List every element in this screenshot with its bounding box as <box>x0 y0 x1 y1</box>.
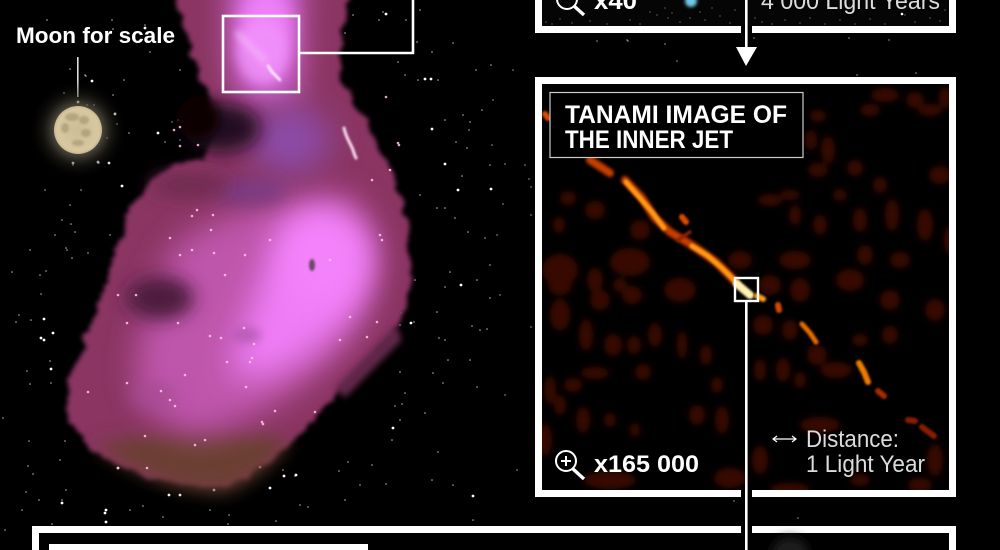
neck purple glow <box>250 106 330 174</box>
panel: TANAMI image of the inner jet <box>538 80 956 497</box>
connector: jet core to bottom panel <box>741 301 752 550</box>
inner jet <box>545 114 934 436</box>
icon: distance arrow <box>773 436 796 442</box>
label: x165 000: x165 000 <box>594 451 699 478</box>
lower lobe bright core <box>232 217 369 378</box>
bottom heading box <box>49 544 368 550</box>
outer lobe fringe <box>68 0 409 486</box>
nebula foreground stars <box>88 97 399 468</box>
radio noise blotches <box>538 87 956 497</box>
panel: optical starfield (x40) <box>535 0 956 33</box>
zoom marker on core <box>735 278 758 301</box>
dark dust patches <box>126 96 402 405</box>
icon: moon <box>28 80 128 180</box>
lower lobe mid tone <box>135 194 375 435</box>
callout box: zoom window on galaxy core with connector <box>223 0 413 92</box>
upper lobe glow <box>232 0 300 100</box>
heading: moon for scale: Moon for scale <box>16 23 175 48</box>
icon: magnifier x40 <box>557 0 584 15</box>
arrow: to TANAMI panel <box>736 0 757 66</box>
radio lobes nebula <box>68 0 409 492</box>
bright upper core <box>240 0 292 76</box>
panel: bottom detail panel <box>36 530 952 550</box>
panel heading box: TANAMI IMAGE OF <box>565 101 787 129</box>
bottom brown fringe <box>95 433 290 492</box>
central galaxy spot <box>309 259 315 271</box>
rough outer lobes <box>68 0 409 486</box>
bright radio filament <box>344 128 356 158</box>
label: distance 1 light year: 1 Light Year <box>806 451 925 478</box>
label: distance 1 light year: Distance: <box>806 426 899 453</box>
panel heading box <box>550 92 803 158</box>
galaxy star glow <box>685 0 697 7</box>
panel heading box: THE INNER JET <box>565 126 733 154</box>
icon: magnifier x165 000 <box>556 451 584 479</box>
label: distance 1 light year <box>806 426 925 478</box>
